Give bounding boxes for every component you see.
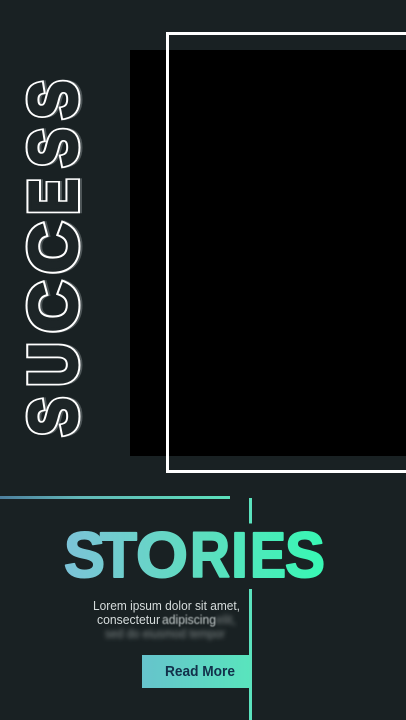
body text: consectetur — [97, 612, 161, 627]
vertical title: SUCCESS: S — [15, 398, 91, 436]
button: Read More — [142, 655, 249, 688]
vertical title: SUCCESS: S — [15, 80, 91, 118]
vertical title: SUCCESS: C — [15, 223, 91, 273]
vertical title: SUCCESS: E — [15, 179, 91, 214]
white frame — [168, 34, 406, 472]
heading: STORIES: S — [285, 519, 325, 591]
heading: STORIES: O — [136, 519, 188, 591]
body text: adipiscing — [162, 612, 216, 627]
vertical title: SUCCESS: U — [15, 343, 91, 386]
heading: STORIES: T — [100, 519, 137, 591]
vertical title: SUCCESS: C — [15, 282, 91, 332]
vertical title: SUCCESS: S — [15, 80, 91, 118]
body text: elit, — [216, 612, 236, 627]
photo placeholder: black panel — [130, 50, 406, 456]
vertical title: SUCCESS: S — [17, 398, 93, 436]
vertical title: SUCCESS: S — [17, 128, 93, 166]
vertical title: SUCCESS: S — [15, 128, 91, 166]
body text: sed do eiusmod tempor — [105, 626, 226, 641]
heading: STORIES: I — [231, 519, 248, 591]
vertical title: SUCCESS: U — [17, 343, 93, 386]
vertical title: SUCCESS: S — [17, 80, 93, 118]
vertical title: SUCCESS — [15, 80, 93, 436]
vertical title: SUCCESS: U — [15, 343, 91, 386]
heading: STORIES: S — [64, 519, 105, 591]
top gradient rule — [0, 496, 230, 499]
vertical title: SUCCESS: S — [15, 128, 91, 166]
vertical title: SUCCESS: S — [15, 398, 91, 436]
button: Read More: Read More — [165, 664, 235, 680]
vertical title: SUCCESS: C — [17, 223, 93, 273]
heading: STORIES: E — [250, 519, 286, 591]
vertical accent line: lower segment — [249, 589, 252, 720]
body text — [93, 598, 240, 641]
vertical title: SUCCESS: E — [17, 179, 93, 214]
vertical title: SUCCESS: C — [17, 282, 93, 332]
body text: Lorem ipsum dolor sit amet, — [93, 598, 240, 613]
vertical title: SUCCESS: C — [15, 223, 91, 273]
heading: STORIES: R — [190, 519, 230, 591]
vertical title: SUCCESS: C — [15, 282, 91, 332]
vertical accent line: upper segment — [249, 498, 252, 524]
vertical title: SUCCESS: E — [15, 179, 91, 214]
